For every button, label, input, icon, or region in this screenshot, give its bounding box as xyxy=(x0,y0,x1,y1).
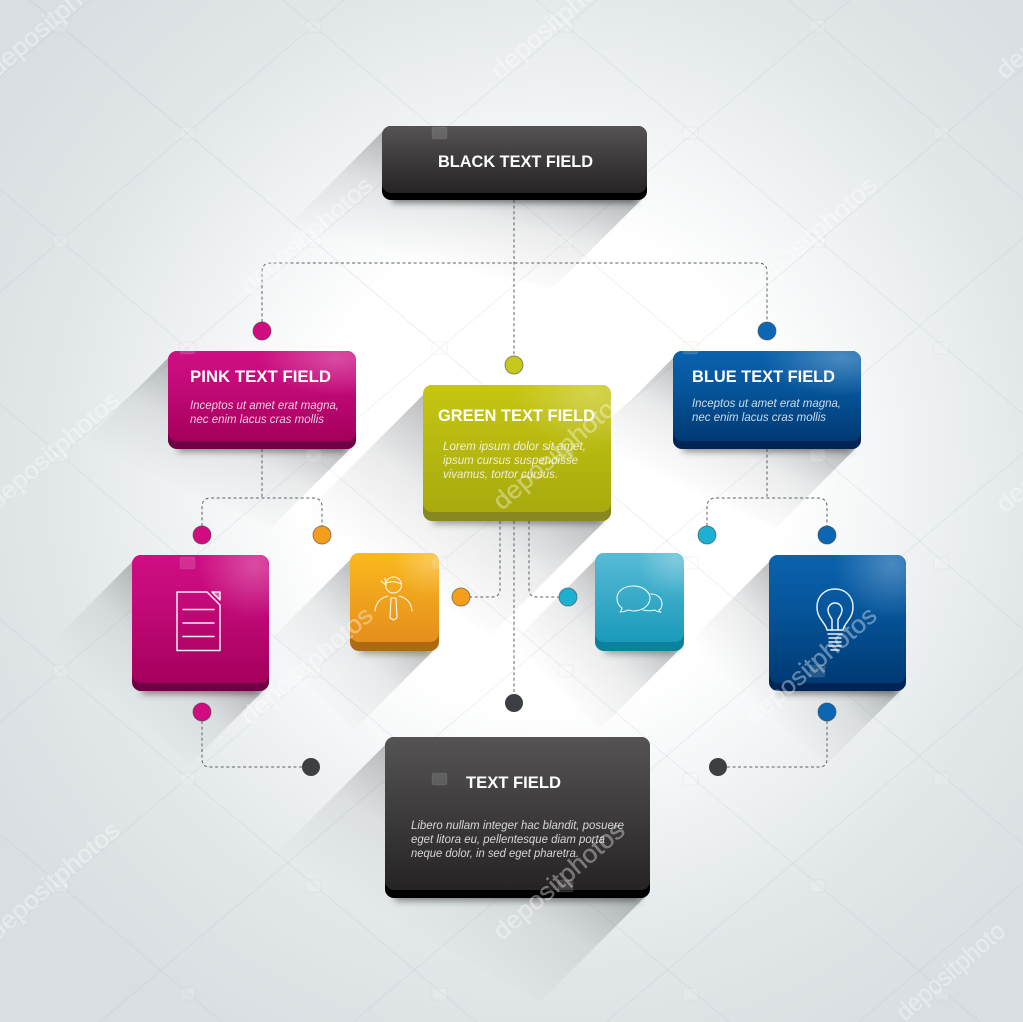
node dot: dark centre xyxy=(505,694,523,712)
node dot: blue top xyxy=(758,322,776,340)
panel: blue icon square xyxy=(769,555,906,694)
panel: orange icon square xyxy=(350,553,439,654)
panel: pink text field xyxy=(168,351,356,452)
node dot: blue bottom xyxy=(818,703,836,721)
watermark text: depositphotos xyxy=(236,171,378,301)
node dot: green xyxy=(505,356,523,374)
text block: blue body: Inceptos ut amet erat magna, xyxy=(692,398,841,410)
node dot: cyan side xyxy=(559,588,577,606)
text block: pink body: nec enim lacus cras mollis xyxy=(190,414,324,426)
text block: green body: vivamus, tortor cursus. xyxy=(443,469,558,481)
node dot: orange upper xyxy=(313,526,331,544)
icon: person with tie xyxy=(375,577,412,620)
node dot: cyan upper xyxy=(698,526,716,544)
dashed connectors xyxy=(202,200,827,767)
node dot: blue right xyxy=(818,526,836,544)
text block: pink body xyxy=(190,400,339,426)
text block: green body xyxy=(443,441,586,481)
text block: dark body xyxy=(411,820,624,860)
panel: green text field xyxy=(423,385,611,524)
text block: pink body: Inceptos ut amet erat magna, xyxy=(190,400,339,412)
icon: document xyxy=(177,592,220,650)
panel: black text field xyxy=(382,126,647,203)
watermark text: depositphotos xyxy=(740,601,882,731)
text block: blue body xyxy=(692,398,841,424)
heading: blue text field: BLUE TEXT FIELD xyxy=(692,367,835,386)
node dot: dark left xyxy=(302,758,320,776)
heading: black text field: BLACK TEXT FIELD xyxy=(438,152,593,171)
panel: blue text field xyxy=(673,351,861,452)
icon: light bulb xyxy=(817,589,853,650)
icon: chat bubbles xyxy=(617,586,662,612)
node dot: pink bottom xyxy=(193,703,211,721)
watermark text: depositphotos xyxy=(488,816,630,946)
node dot: pink top xyxy=(253,322,271,340)
panel: pink icon square xyxy=(132,555,269,694)
heading: pink text field: PINK TEXT FIELD xyxy=(190,367,331,386)
watermark text: depositphotos xyxy=(740,171,882,301)
text block: green body: Lorem ipsum dolor sit amet, xyxy=(443,441,586,453)
long shadows xyxy=(52,132,906,1002)
text block: dark body: Libero nullam integer hac blandit, posuere xyxy=(411,820,624,832)
text block: dark body: eget litora eu, pellentesque diam porta xyxy=(411,834,605,846)
node dot: pink left xyxy=(193,526,211,544)
panel: cyan icon square xyxy=(595,553,684,654)
text block: green body: ipsum cursus suspendisse xyxy=(443,455,578,467)
watermark text: depositphotos xyxy=(236,601,378,731)
heading: green text field: GREEN TEXT FIELD xyxy=(438,406,595,425)
node dot: orange side xyxy=(452,588,470,606)
heading: text field: TEXT FIELD xyxy=(466,773,561,792)
panel: dark text field xyxy=(385,737,650,901)
node dot: dark right xyxy=(709,758,727,776)
text block: dark body: neque dolor, in sed eget pharetra. xyxy=(411,848,579,860)
watermark text: depositphotos xyxy=(488,386,630,516)
text block: blue body: nec enim lacus cras mollis xyxy=(692,412,826,424)
